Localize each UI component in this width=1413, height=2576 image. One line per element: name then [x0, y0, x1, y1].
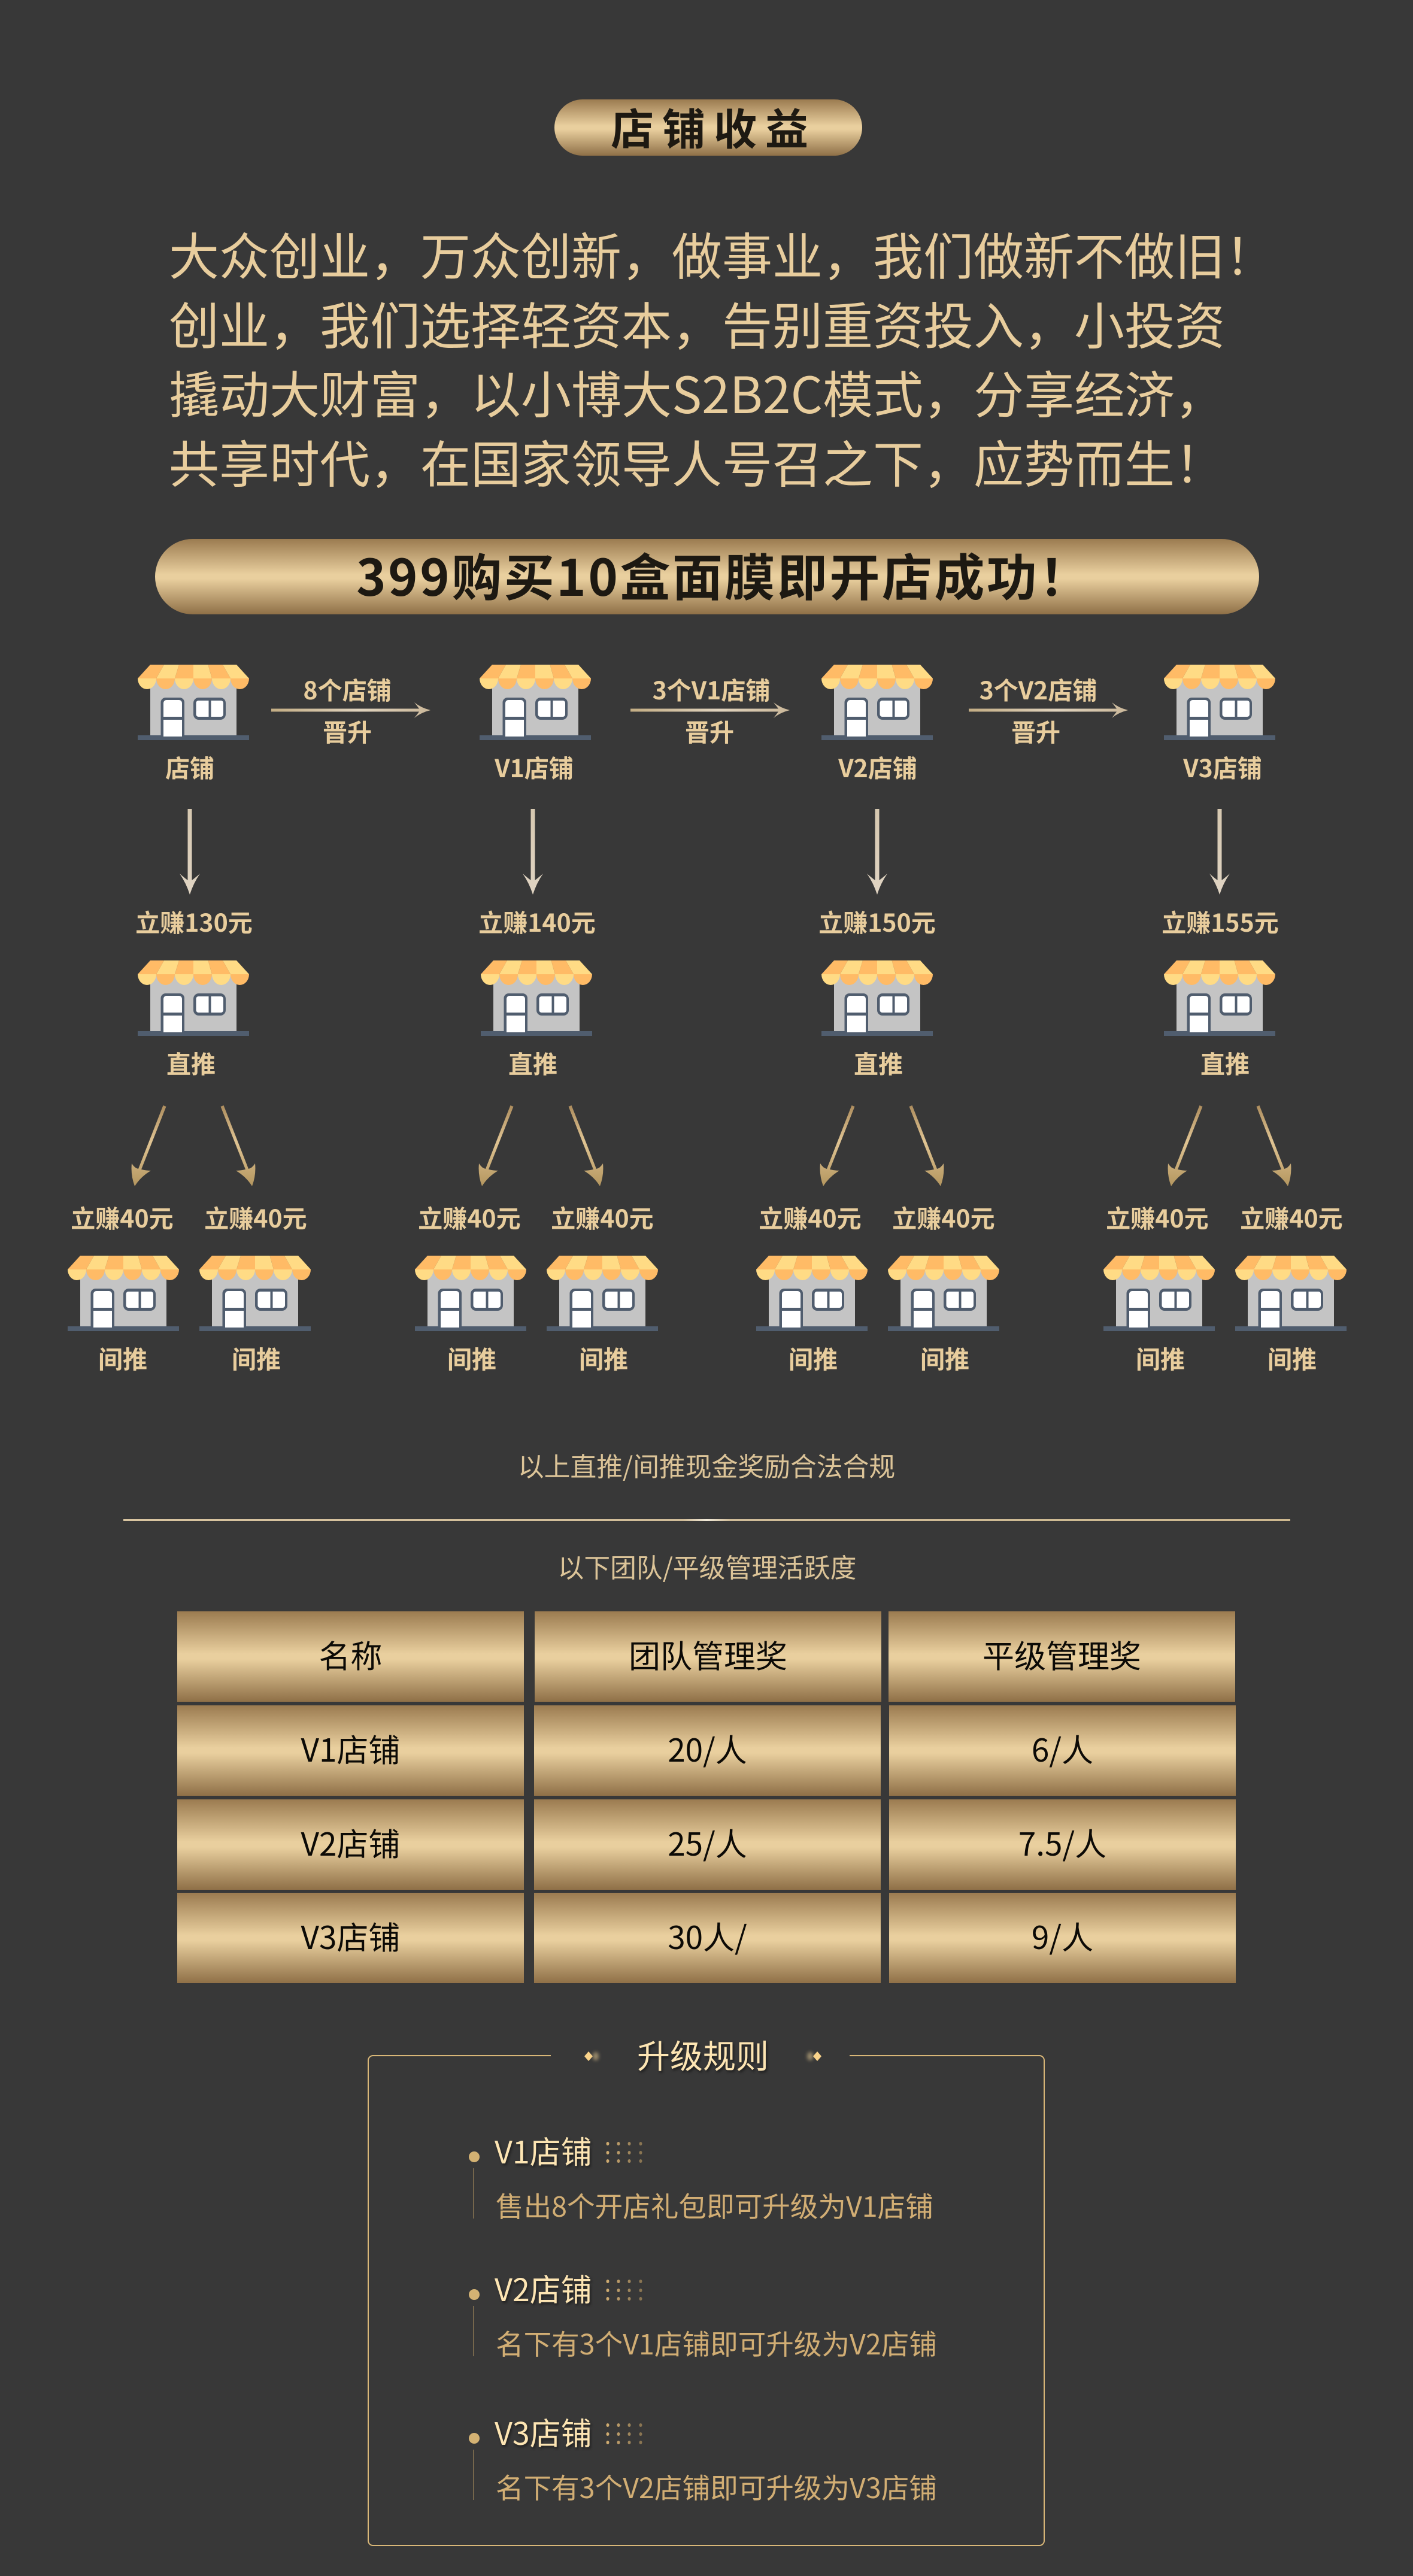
icon: dot grid [605, 2423, 644, 2445]
item title: V2店铺 [495, 2265, 592, 2310]
table cell: 7.5/人 [889, 1799, 1236, 1890]
earning: 立赚40元: 立赚40元 [418, 1199, 521, 1235]
earning: 立赚40元: 立赚40元 [1240, 1199, 1343, 1235]
table cell: 25/人: 25/人 [668, 1820, 747, 1865]
arrow: promotion to V1 [271, 702, 430, 718]
table cell: 20/人 [534, 1705, 881, 1796]
icon: direct store 4 [1164, 960, 1275, 1036]
earning: 立赚150元: 立赚150元 [818, 903, 936, 939]
table cell: V2店铺: V2店铺 [301, 1820, 400, 1865]
heading: 升级规则: 升级规则 [637, 2030, 769, 2078]
table cell: 25/人 [534, 1799, 881, 1890]
table cell: 团队管理奖: 团队管理奖 [629, 1632, 787, 1677]
label: 间推: 间推 [447, 1339, 496, 1375]
note: 以下团队/平级管理活跃度: 以下团队/平级管理活跃度 [558, 1547, 856, 1585]
label: 间推: 间推 [1268, 1339, 1317, 1375]
label: 直推: 直推 [508, 1044, 557, 1080]
table cell: 20/人: 20/人 [668, 1726, 747, 1771]
note: 以上直推/间推现金奖励合法合规: 以上直推/间推现金奖励合法合规 [518, 1445, 895, 1484]
panel: management bonus table [177, 1611, 1236, 1983]
icon: indirect store 1 [68, 1256, 179, 1331]
arrow: V2 to direct [867, 809, 887, 895]
table cell: V2店铺 [177, 1799, 524, 1890]
label: 间推: 间推 [232, 1339, 281, 1375]
item description: 售出8个开店礼包即可升级为V1店铺 [496, 2185, 933, 2225]
label: 间推: 间推 [789, 1339, 838, 1375]
title pill: 店铺收益 [554, 99, 862, 156]
timeline line [473, 2450, 474, 2500]
panel frame [367, 2054, 1045, 2547]
table cell: 9/人: 9/人 [1032, 1913, 1093, 1959]
banner pill: 399购买10盒面膜 [155, 539, 1259, 614]
timeline line [473, 2168, 474, 2219]
arrow: diagonal left col 2 [479, 1105, 514, 1186]
arrow: V1 to direct [523, 809, 543, 895]
label: 店铺: 店铺 [165, 748, 214, 784]
label: 间推: 间推 [920, 1339, 969, 1375]
earning: 立赚40元: 立赚40元 [71, 1199, 174, 1235]
table cell: 30人/: 30人/ [668, 1913, 747, 1959]
icon: indirect store 8 [1235, 1256, 1347, 1331]
table cell: 团队管理奖 [535, 1611, 881, 1702]
icon: direct store 2 [481, 960, 592, 1036]
icon: V2 store [821, 665, 933, 740]
arrow: diagonal right col 3 [909, 1105, 944, 1186]
label: 晋升: 晋升 [685, 713, 734, 748]
icon: dot grid [605, 2280, 644, 2301]
icon: indirect store 5 [756, 1256, 868, 1331]
icon: direct store 1 [138, 960, 249, 1036]
table cell: 7.5/人: 7.5/人 [1018, 1820, 1106, 1865]
arrow: diagonal left col 1 [132, 1105, 166, 1186]
table cell: 6/人 [889, 1705, 1236, 1796]
earning: 立赚155元: 立赚155元 [1162, 903, 1279, 939]
icon: indirect store 7 [1103, 1256, 1215, 1331]
table cell: V1店铺: V1店铺 [301, 1726, 400, 1771]
earning: 立赚140元: 立赚140元 [478, 903, 596, 939]
table cell: V1店铺 [177, 1705, 524, 1796]
icon: dot grid [605, 2142, 644, 2163]
arrow: diagonal left col 3 [820, 1105, 855, 1186]
panel: store earnings flow [68, 665, 1347, 1375]
intro paragraph [169, 217, 1275, 497]
icon: direct store 3 [821, 960, 933, 1036]
table cell: 平级管理奖 [889, 1611, 1235, 1702]
item title: V1店铺 [495, 2128, 592, 2172]
rule item: V1店铺 [469, 2079, 948, 2169]
title text: 店铺收益 [611, 95, 817, 157]
table cell: 名称 [177, 1611, 524, 1702]
intro paragraph: 创业，我们选择轻资本，告别重资投入，小投资 [169, 286, 1225, 359]
intro paragraph: 共享时代，在国家领导人号召之下，应势而生！ [169, 425, 1225, 497]
arrow: diagonal right col 2 [569, 1105, 604, 1186]
earning: 立赚40元: 立赚40元 [892, 1199, 995, 1235]
label: 直推: 直推 [1200, 1044, 1250, 1080]
intro paragraph: 大众创业，万众创新，做事业，我们做新不做旧！ [169, 217, 1275, 290]
earning: 立赚40元: 立赚40元 [204, 1199, 307, 1235]
earning: 立赚40元: 立赚40元 [759, 1199, 862, 1235]
arrow: V3 to direct [1209, 809, 1230, 895]
panel: upgrade rules [368, 2079, 1045, 2576]
label: 直推: 直推 [166, 1044, 216, 1080]
icon: store [138, 665, 249, 740]
arrow: promotion to V3 [969, 702, 1128, 718]
icon: indirect store 2 [199, 1256, 311, 1331]
arrow: promotion to V2 [630, 702, 790, 718]
icon: V1 store [480, 665, 591, 740]
banner text: 399购买10盒面膜即开店成功！ [356, 538, 1091, 611]
ornament: left diamond [581, 2048, 605, 2065]
item description: 名下有3个V2店铺即可升级为V3店铺 [496, 2466, 937, 2507]
bullet [469, 2289, 480, 2300]
intro paragraph: 撬动大财富，以小博大S2B2C模式，分享经济， [169, 356, 1225, 428]
table cell: 6/人: 6/人 [1032, 1726, 1093, 1771]
label: 晋升: 晋升 [323, 713, 372, 748]
table cell: 平级管理奖: 平级管理奖 [983, 1632, 1141, 1677]
label: 间推: 间推 [1136, 1339, 1185, 1375]
table cell: 名称: 名称 [319, 1632, 382, 1677]
earning: 立赚40元: 立赚40元 [551, 1199, 654, 1235]
table cell: V3店铺: V3店铺 [301, 1913, 400, 1959]
label: V1店铺: V1店铺 [495, 748, 574, 784]
icon: indirect store 4 [547, 1256, 658, 1331]
label: 3个V2店铺: 3个V2店铺 [980, 671, 1097, 707]
icon: V3 store [1164, 665, 1275, 740]
table cell: V3店铺 [177, 1893, 524, 1983]
item description: 名下有3个V1店铺即可升级为V2店铺 [496, 2323, 937, 2363]
timeline line [473, 2306, 474, 2356]
item title: V3店铺 [495, 2409, 592, 2454]
arrow: diagonal left col 4 [1168, 1105, 1202, 1186]
arrow: diagonal right col 1 [220, 1105, 255, 1186]
label: 间推: 间推 [98, 1339, 147, 1375]
bullet [469, 2433, 480, 2444]
earning: 立赚130元: 立赚130元 [135, 903, 253, 939]
ornament: right diamond [802, 2048, 826, 2065]
label: V2店铺: V2店铺 [838, 748, 917, 784]
label: 间推: 间推 [579, 1339, 628, 1375]
rule item: V2店铺 [469, 2217, 948, 2307]
label: 8个店铺: 8个店铺 [303, 671, 392, 707]
rule item: V3店铺 [469, 2360, 948, 2450]
icon: indirect store 3 [415, 1256, 526, 1331]
label: 3个V1店铺: 3个V1店铺 [653, 671, 770, 707]
icon: indirect store 6 [888, 1256, 999, 1331]
arrow: diagonal right col 4 [1254, 1105, 1293, 1187]
label: 直推: 直推 [854, 1044, 903, 1080]
label: V3店铺: V3店铺 [1183, 748, 1262, 784]
bullet [469, 2151, 480, 2162]
arrow: store to direct [180, 809, 200, 895]
earning: 立赚40元: 立赚40元 [1106, 1199, 1209, 1235]
label: 晋升: 晋升 [1011, 713, 1060, 748]
table cell: 30人/ [534, 1893, 881, 1983]
table cell: 9/人 [889, 1893, 1236, 1983]
